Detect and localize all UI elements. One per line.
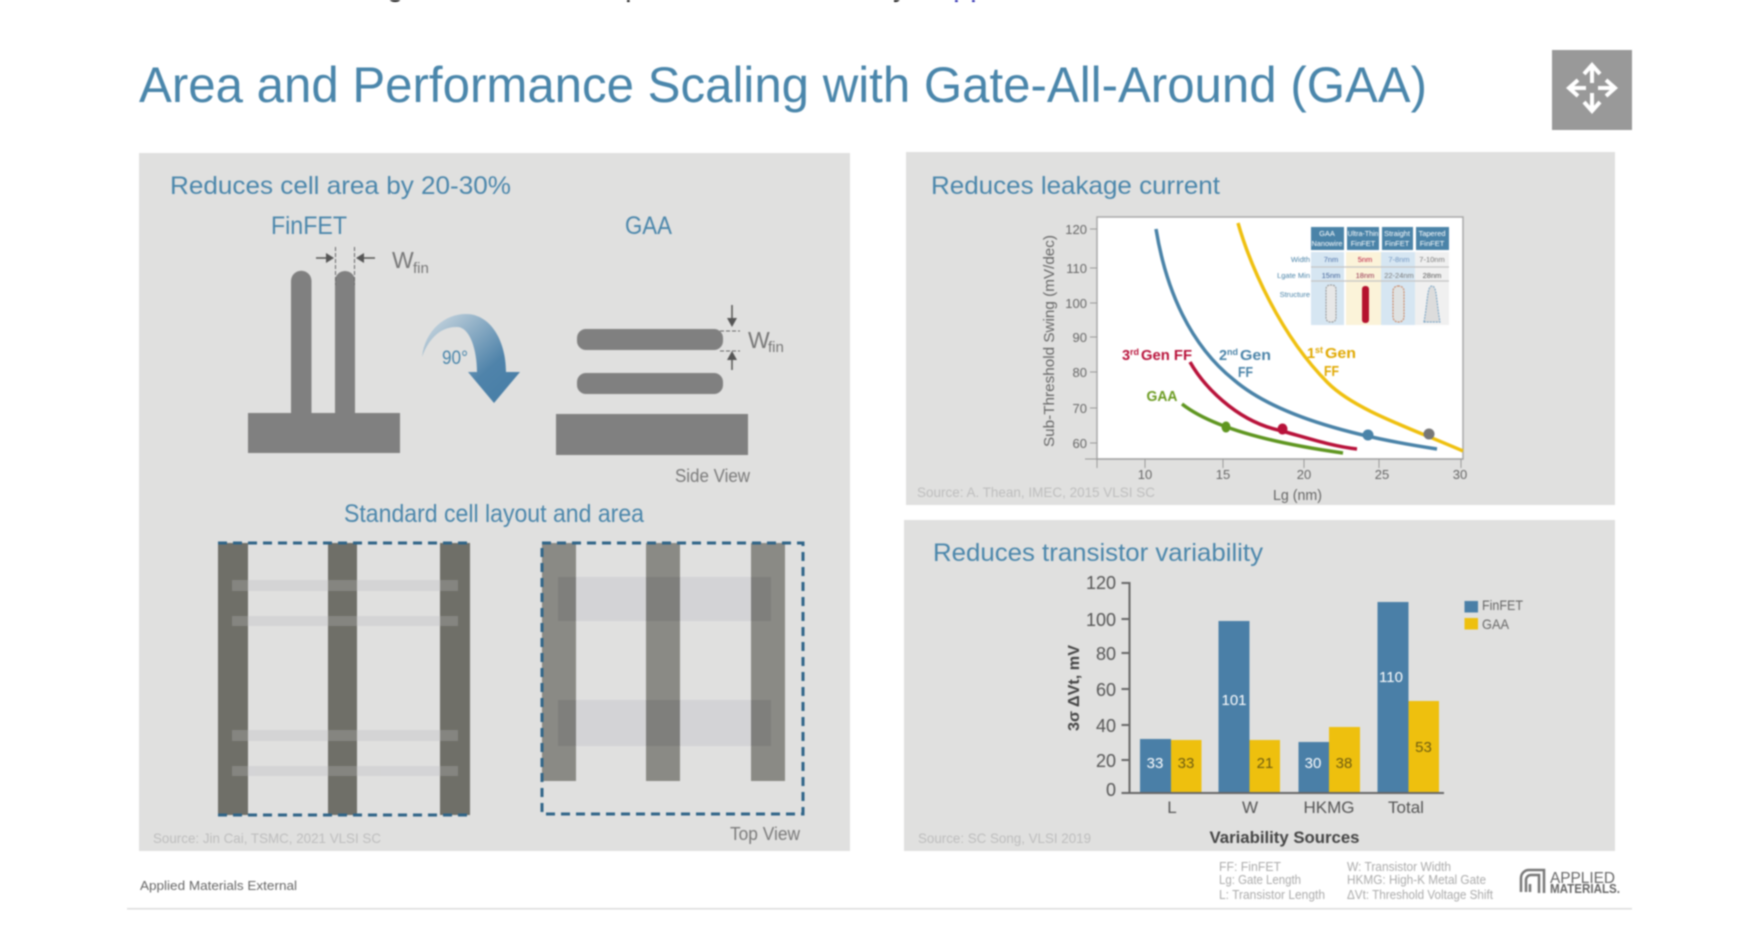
- footer label: Applied Materials External: [140, 878, 297, 893]
- curve label: 3rd Gen FF: [1122, 347, 1192, 364]
- heading: reduces cell area: Reduces cell area by 20-30%: [170, 172, 511, 200]
- curve label: 2nd Gen FF: FF: [1238, 365, 1253, 381]
- footnote glossary: [1219, 859, 1493, 902]
- source: SC Song: Source: SC Song, VLSI 2019: [918, 830, 1091, 846]
- curve label: 2nd Gen FF: Gen: [1240, 348, 1271, 364]
- value labels: 53: [1415, 739, 1432, 756]
- x axis labels: Total: [1388, 798, 1424, 817]
- curve: 2nd Gen FF: [1156, 229, 1437, 449]
- footnote glossary: Lg: Gate Length: [1219, 872, 1301, 887]
- inset table: transistor structures: 15nm: [1322, 271, 1340, 280]
- label: side view: Side View: [675, 466, 751, 486]
- y axis labels: 20: [1096, 751, 1116, 771]
- curve label: 1st Gen FF: 1: [1307, 346, 1315, 362]
- heading: reduces transistor variability: Reduces transistor variability: [933, 539, 1264, 567]
- line chart: sub-threshold swing vs gate length: 10: [1138, 467, 1152, 482]
- curve: GAA: [1182, 404, 1343, 453]
- line chart: sub-threshold swing vs gate length: [1041, 217, 1467, 504]
- legend: FinFET: [1482, 597, 1523, 613]
- panel: leakage current: [906, 152, 1615, 505]
- diagram: GAA side view: [556, 305, 784, 455]
- inset table: transistor structures: Nanowire: [1312, 239, 1342, 248]
- logo: Applied Materials: [1521, 870, 1620, 896]
- diagram: FinFET side view: [248, 247, 429, 453]
- icon: move handle: [1552, 50, 1632, 130]
- title: Area and Performance Scaling with Gate-All-Around (GAA): [139, 57, 1427, 113]
- panel: cell area: [139, 153, 850, 851]
- source: A. Thean: Source: A. Thean, IMEC, 2015 VLSI SC: [917, 484, 1155, 500]
- heading: reduces leakage current: Reduces leakage current: [931, 172, 1220, 200]
- curve label: 1st Gen FF: Gen: [1325, 346, 1356, 362]
- line chart: sub-threshold swing vs gate length: 80: [1073, 365, 1087, 380]
- y axis title: 3σ ΔVt, mV: [1066, 645, 1083, 731]
- value labels: 33: [1147, 755, 1163, 772]
- legend: GAA: [1482, 616, 1510, 632]
- GAA bars: [1171, 701, 1439, 793]
- inset table: transistor structures: 7-8nm: [1388, 255, 1410, 264]
- curve label: GAA: GAA: [1146, 389, 1178, 405]
- line chart: sub-threshold swing vs gate length: 15: [1216, 467, 1230, 482]
- clipped line of text at top edge: [204, 0, 987, 3]
- legend: [1464, 597, 1523, 632]
- diagram: FinFET side view: W: [392, 247, 414, 273]
- footnote glossary: ΔVt: Threshold Voltage Shift: [1347, 887, 1493, 902]
- FinFET bars: [1140, 602, 1408, 793]
- curve label: 3rd Gen FF: rd: [1130, 347, 1139, 357]
- label: FinFET: FinFET: [271, 212, 347, 240]
- source: Jin Cai: Source: Jin Cai, TSMC, 2021 VLSI SC: [153, 830, 381, 846]
- label: GAA: GAA: [625, 212, 672, 240]
- line chart: sub-threshold swing vs gate length: 90: [1073, 330, 1087, 345]
- line chart: sub-threshold swing vs gate length: 100: [1065, 296, 1087, 311]
- inset table: transistor structures: Ultra-Thin: [1348, 229, 1378, 238]
- arrow: 90 degree rotation: [422, 314, 520, 403]
- value labels: 110: [1379, 669, 1403, 686]
- y axis labels: 40: [1096, 716, 1116, 736]
- x axis labels: L: [1167, 798, 1177, 817]
- x axis labels: HKMG: [1304, 798, 1354, 817]
- inset table: transistor structures: 5nm: [1358, 255, 1372, 264]
- heading: standard cell layout: Standard cell layout and area: [344, 500, 644, 528]
- y axis labels: 100: [1086, 610, 1116, 630]
- curve label: 2nd Gen FF: 2: [1219, 348, 1227, 364]
- inset table: transistor structures: Straight: [1384, 229, 1411, 238]
- curve label: 3rd Gen FF: 3: [1122, 348, 1130, 364]
- footnote glossary: HKMG: High-K Metal Gate: [1347, 872, 1486, 887]
- footnote glossary: W: Transistor Width: [1347, 859, 1451, 874]
- inset table: transistor structures: Width: [1291, 255, 1310, 264]
- value labels: 21: [1257, 755, 1273, 772]
- arrow: 90 degree rotation: 90°: [442, 348, 468, 369]
- curve label: 2nd Gen FF: nd: [1227, 347, 1238, 357]
- axes: [1122, 582, 1444, 794]
- curve label: 3rd Gen FF: Gen FF: [1141, 348, 1192, 364]
- panel: transistor variability: [904, 520, 1615, 851]
- inset table: transistor structures: 18nm: [1356, 271, 1374, 280]
- line chart: sub-threshold swing vs gate length: 110: [1066, 261, 1087, 276]
- value labels: [1147, 669, 1432, 772]
- inset table: transistor structures: 22-24nm: [1384, 271, 1414, 280]
- curve label: 1st Gen FF: FF: [1324, 364, 1339, 380]
- line chart: sub-threshold swing vs gate length: 120: [1065, 222, 1087, 237]
- line chart: sub-threshold swing vs gate length: Lg (nm): [1273, 487, 1322, 504]
- inset table: transistor structures: GAA: [1319, 229, 1335, 238]
- y axis labels: 80: [1096, 644, 1116, 664]
- y axis labels: 0: [1106, 780, 1116, 800]
- inset table: transistor structures: FinFET: [1351, 239, 1376, 248]
- line chart: sub-threshold swing vs gate length: Sub-Threshold Swing (mV/dec): [1041, 235, 1058, 447]
- line chart: sub-threshold swing vs gate length: 70: [1073, 401, 1087, 416]
- value labels: 101: [1221, 692, 1247, 709]
- x axis labels: [1167, 798, 1424, 817]
- line chart: sub-threshold swing vs gate length: 60: [1073, 436, 1087, 451]
- inset table: transistor structures: Structure: [1280, 290, 1310, 299]
- inset table: transistor structures: 7-10nm: [1419, 255, 1445, 264]
- logo: Applied Materials: MATERIALS.: [1550, 881, 1620, 896]
- diagram: FinFET top view layout: [218, 543, 470, 815]
- diagram: FinFET side view: fin: [413, 260, 429, 277]
- x axis title: Variability Sources: [1210, 828, 1360, 847]
- data points: [1222, 422, 1434, 440]
- footnote glossary: L: Transistor Length: [1219, 887, 1325, 902]
- value labels: 30: [1305, 755, 1321, 772]
- inset table: transistor structures: FinFET: [1420, 239, 1445, 248]
- inset table: transistor structures: 28nm: [1423, 271, 1441, 280]
- inset table: transistor structures: 7nm: [1324, 255, 1338, 264]
- diagram: GAA side view: fin: [768, 339, 784, 356]
- value labels: 38: [1336, 755, 1352, 772]
- inset table: transistor structures: Lgate Min: [1277, 271, 1310, 280]
- line chart: sub-threshold swing vs gate length: 20: [1297, 467, 1311, 482]
- curve label: 1st Gen FF: [1307, 345, 1356, 380]
- diagram: GAA side view: W: [748, 327, 770, 353]
- footnote glossary: FF: FinFET: [1219, 859, 1281, 874]
- value labels: 33: [1178, 755, 1194, 772]
- y axis labels: [1086, 573, 1116, 800]
- footer rule: [127, 908, 1632, 910]
- label: top view: Top View: [730, 824, 801, 844]
- y axis labels: 120: [1086, 573, 1116, 593]
- inset table: transistor structures: Tapered: [1418, 229, 1446, 238]
- line chart: sub-threshold swing vs gate length: 25: [1375, 467, 1389, 482]
- curve: 1st Gen FF: [1238, 223, 1463, 451]
- curve label: 2nd Gen FF: [1219, 347, 1271, 381]
- bar chart: variability sources: [1066, 573, 1523, 847]
- inset table: transistor structures: FinFET: [1385, 239, 1410, 248]
- curve label: 1st Gen FF: st: [1315, 345, 1323, 355]
- inset table: transistor structures: [1277, 227, 1449, 325]
- x axis labels: W: [1242, 798, 1258, 817]
- y axis labels: 60: [1096, 680, 1116, 700]
- logo: Applied Materials: APPLIED: [1550, 870, 1615, 887]
- curve: 3rd Gen FF: [1190, 362, 1357, 449]
- line chart: sub-threshold swing vs gate length: 30: [1453, 467, 1467, 482]
- diagram: GAA top view layout: [542, 543, 803, 814]
